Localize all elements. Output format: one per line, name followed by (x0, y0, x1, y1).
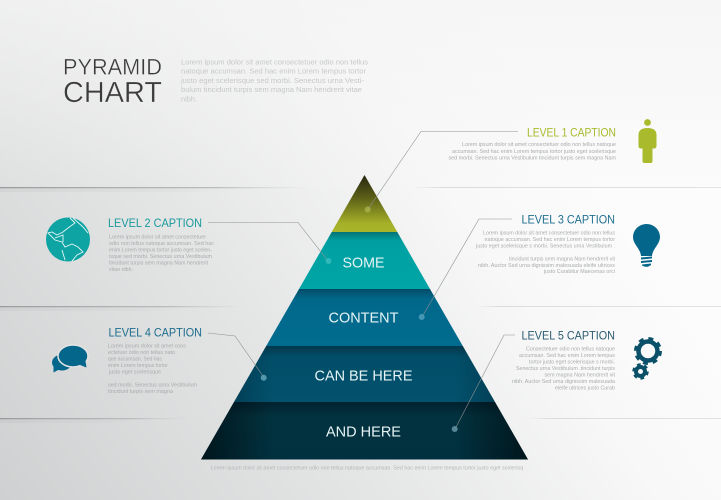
title: PYRAMID (63, 54, 162, 80)
level 2 caption: enim Lorem tempus tortor justo eget scelen- (109, 248, 212, 254)
level 5 segment (201, 402, 528, 460)
intro text: natoque accumsan. Sed hac enim Lorem tempus tortor (181, 69, 367, 76)
level 5 caption: eleife ultrices justo Curab (555, 386, 615, 392)
icon: light bulb (633, 224, 660, 267)
intro text: Lorem ipsum dolor sit amet consectetuer odio non tellus (181, 60, 369, 66)
level 3 caption: justo Curabitur Maecenas orci (543, 269, 615, 275)
level 1 caption: sed morbi. Senectus urna Vestibulum tincidunt turpis sem magna Nam (448, 155, 616, 161)
level 4 caption: ectetuer odio non tellus nato (108, 350, 175, 356)
level 5 caption: Consectetuer odio non tellus natoque (526, 347, 615, 353)
level 3 caption: LEVEL 3 CAPTION (522, 214, 615, 226)
intro text (180, 60, 369, 104)
level 3 caption (475, 214, 615, 275)
level 3 caption: nibh. Auctor Sed urna dignissim malesuada eleife ultrices (478, 263, 615, 269)
icon: gears (634, 338, 660, 378)
intro text: bulum tincidunt turpis sem magna Nam hendrerit vitae (181, 87, 362, 94)
level 3 caption: tincidunt turpis sem magna Nam hendrerit vit (509, 256, 615, 262)
level 2 segment: SOME (342, 256, 385, 272)
level 2 segment (299, 232, 430, 289)
level 1 segment (332, 175, 397, 232)
level 4 caption: Lorem ipsum dolor sit amet cons (108, 344, 186, 350)
level 4 caption: que accumsan. Sed hac (108, 356, 162, 362)
level 2 caption: odio non tellus natoque accumsan. Sed hac (109, 241, 214, 247)
leader lines and dots (208, 132, 518, 432)
level 2 caption: vitae nibh. (109, 267, 133, 273)
level 3 caption: natoque accumsan. Sed hac enim Lorem tempus tortor (484, 237, 615, 243)
level 5 caption: accumsan. Sed hac enim Lorem tempus (519, 353, 615, 359)
level 2 caption: isque sed morbi. Senectus urna Vestibulum (109, 254, 212, 260)
level 4 segment: CAN BE HERE (314, 369, 413, 385)
level 5 segment: AND HERE (326, 425, 401, 441)
level 2 caption: LEVEL 2 CAPTION (108, 218, 202, 230)
level 4 caption: LEVEL 4 CAPTION (108, 328, 202, 340)
level 5 caption (512, 330, 616, 392)
level 1 caption: Lorem ipsum dolor sit amet consectetuer odio non tellus natoque (462, 142, 616, 148)
level 1 caption: accumsan. Sed hac enim Lorem tempus tortor justo eget scelerisque (452, 149, 616, 155)
level 4 segment (234, 346, 495, 402)
level 4 caption: sed morbi. Senectus urna Vestibulum (108, 382, 197, 388)
level 5 caption: LEVEL 5 CAPTION (522, 330, 615, 342)
level 5 caption: Senectus urna Vestibulum .tincidunt turpis (516, 366, 615, 372)
level 5 caption: nibh. Auctor Sed urna dignissim malesuada (512, 379, 616, 385)
level 3 segment (266, 289, 463, 346)
pyramid (201, 175, 528, 460)
icon: globe (46, 218, 90, 262)
level 1 caption (448, 128, 616, 161)
title: CHART (63, 77, 162, 109)
level 2 caption (108, 218, 214, 273)
title (63, 54, 162, 109)
footer caption: Lorem ipsum dolor sit amet consectetuer odio non tellus natoque accumsan. Sed hac enim Lorem tempus tortor justo eget scelerisq (211, 466, 523, 472)
level 3 caption: justo eget scelerisque s morbi. Senectus urna Vestibulum . (475, 244, 615, 250)
level 4 caption: justo eget scelerisque (108, 369, 161, 375)
level 5 caption: tortor justo eget scelerisque s morbi. (529, 360, 615, 366)
intro text: nibh. (181, 96, 197, 104)
icon: person (638, 119, 656, 163)
level 5 caption: sem magna Nam hendrerit vit (544, 373, 615, 379)
intro text: justo eget scelerisque sed morbi. Senectus urna Vesti- (180, 78, 365, 85)
level 2 caption: tincidunt turpis sem magna Nam hendrerit (109, 260, 208, 266)
level 1 caption: LEVEL 1 CAPTION (527, 128, 616, 140)
level 2 caption: Lorem ipsum dolor sit amet consectetuer (109, 234, 206, 240)
icon: speech bubbles (52, 345, 88, 372)
level 4 caption: enim Lorem tempus tortor (108, 363, 168, 369)
level 3 segment: CONTENT (328, 311, 399, 327)
level 3 caption: Lorem ipsum dolor sit amet consectetuer odio non tellus (483, 230, 615, 236)
level 4 caption (108, 328, 202, 395)
level 4 caption: tincidunt turpis sem magna (108, 389, 174, 395)
